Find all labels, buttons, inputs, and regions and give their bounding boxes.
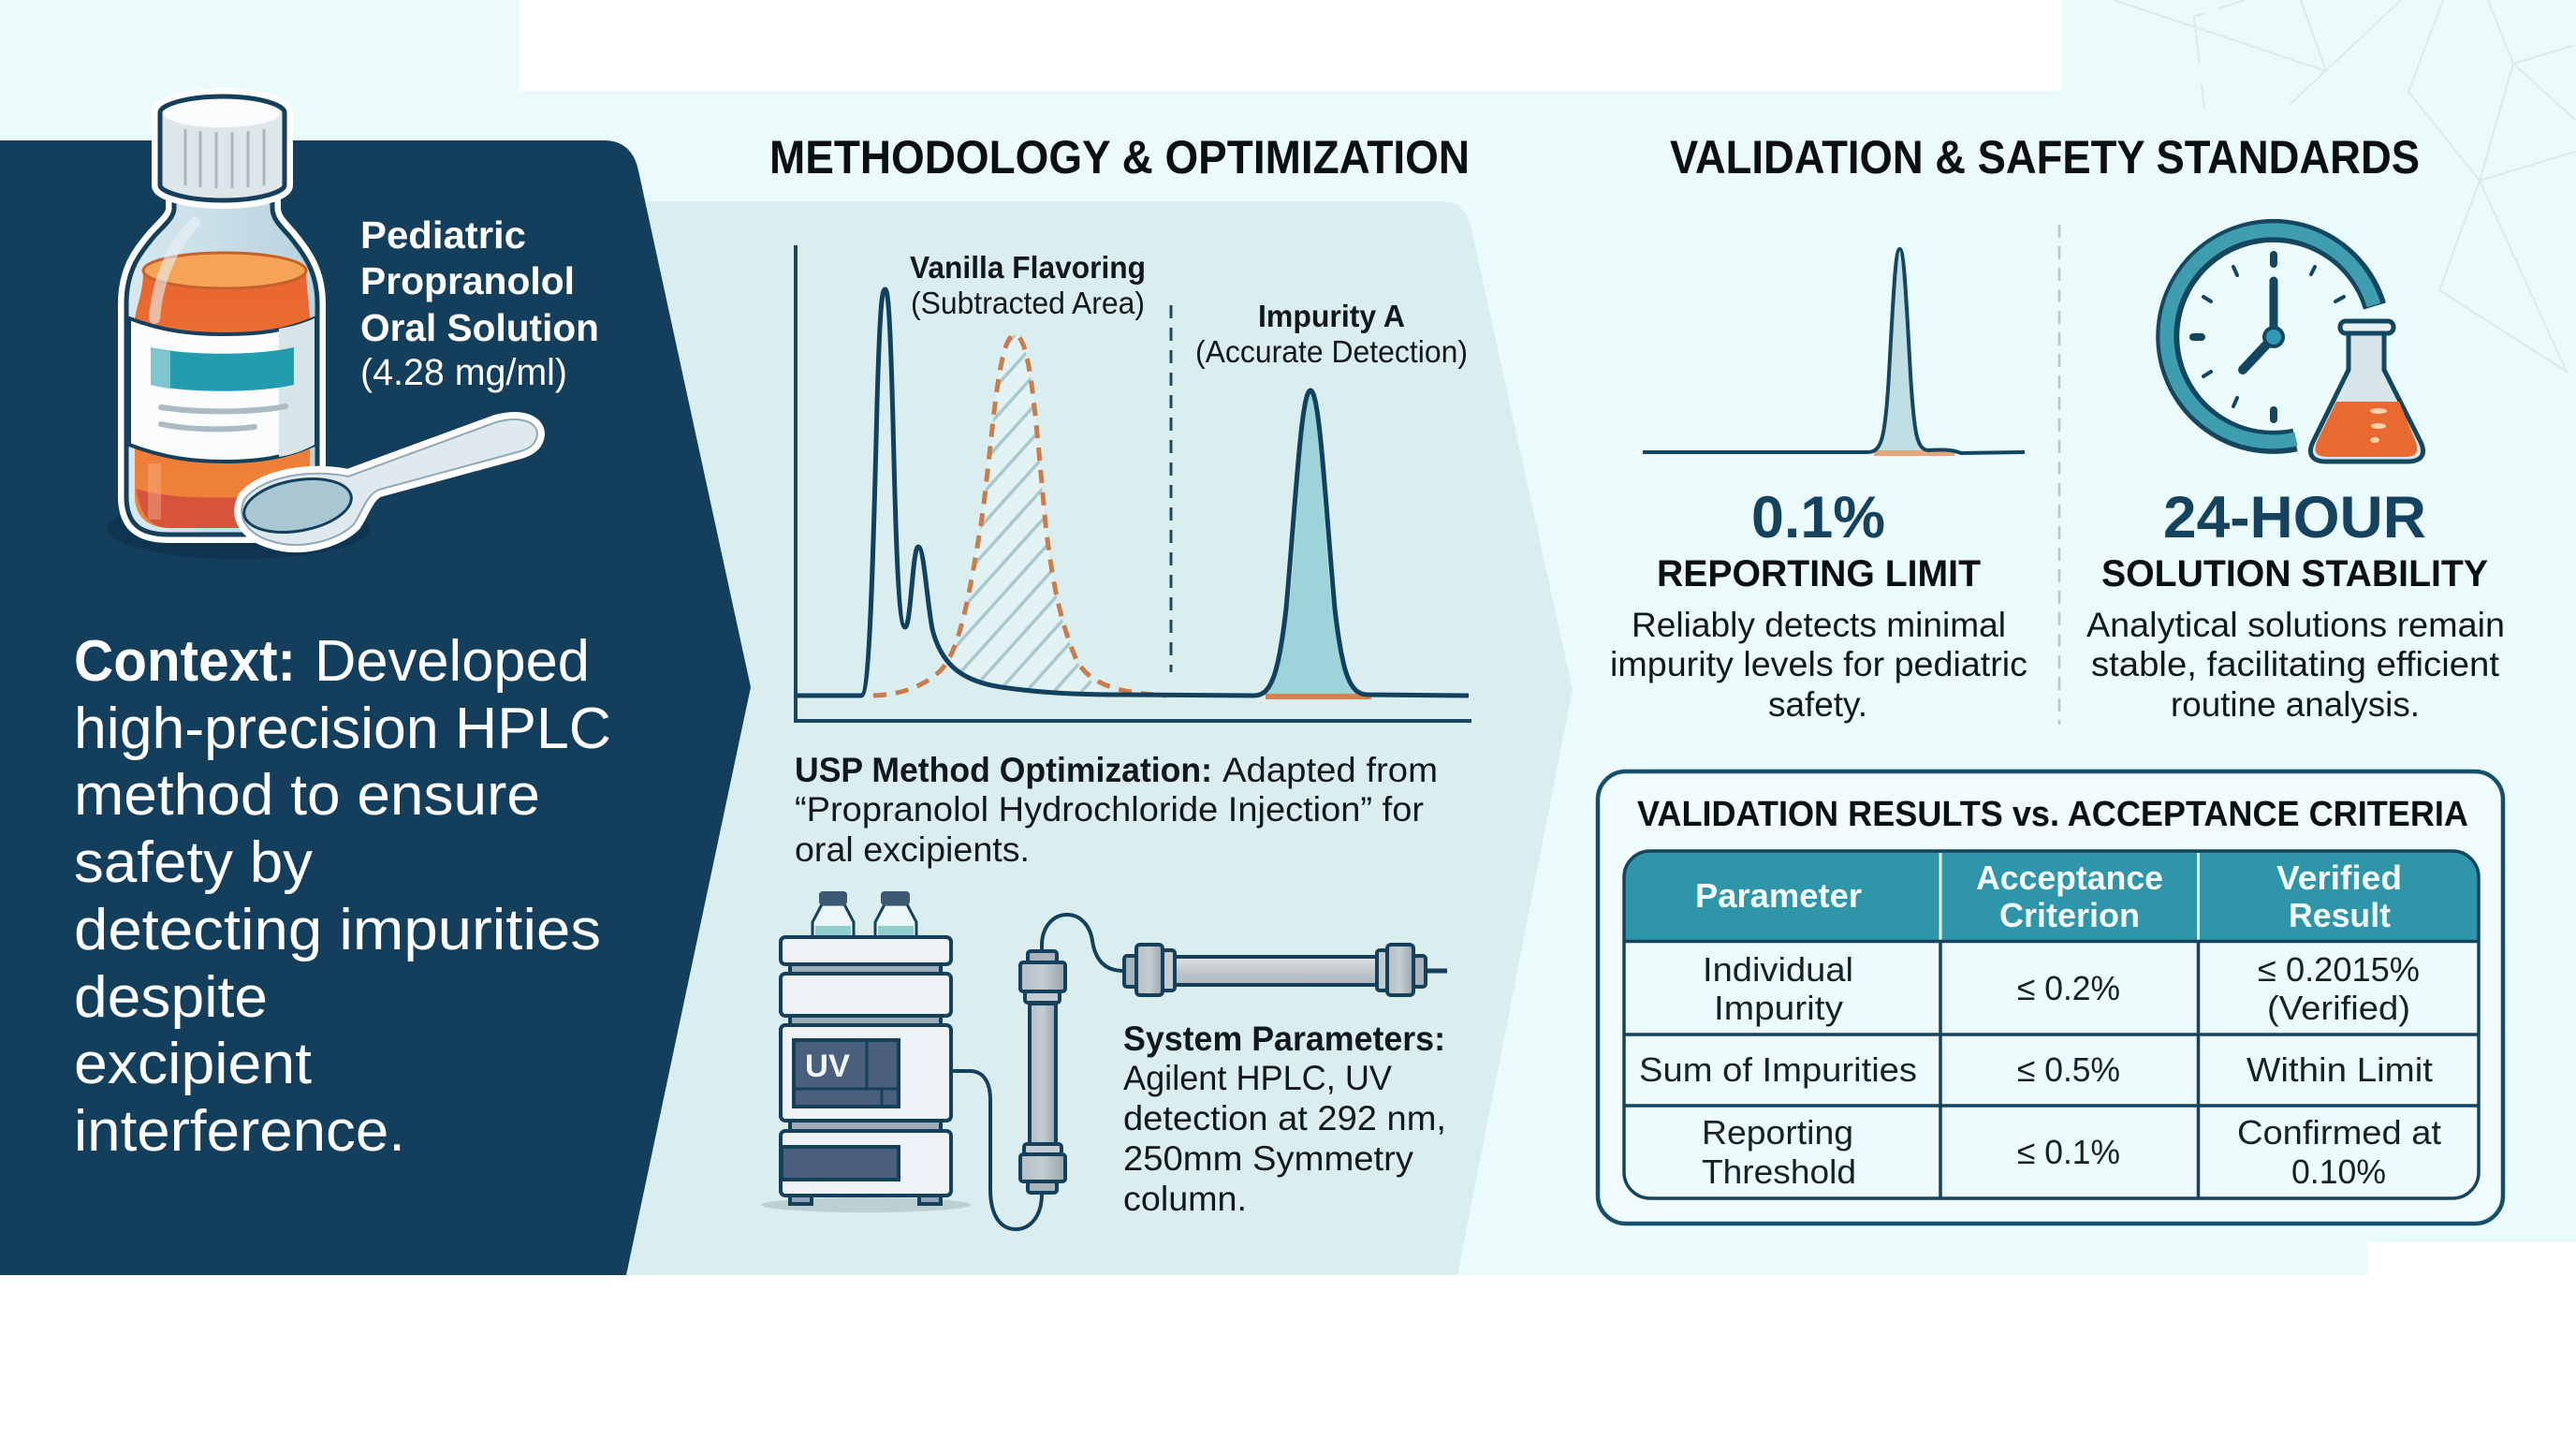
row: reporting threshold: Reporting [1702,1113,1853,1152]
solvent bottles [812,891,916,937]
tier 2 [781,974,951,1016]
row: reporting threshold: 0.10% [2291,1152,2386,1191]
reporting limit description: Reliably detects minimal [1632,606,2006,644]
product name: Propranolol [360,259,575,302]
row: reporting threshold: ≤ 0.1% [2017,1133,2120,1171]
USP text: Adapted from [1222,751,1438,789]
context text: Context: [74,629,296,694]
row: individual impurity [1703,950,2420,1027]
icon: clock and flask [2167,230,2423,462]
row: reporting threshold: Confirmed at [2237,1113,2441,1152]
UV label: UV [805,1049,850,1084]
stability description: stable, facilitating efficient [2091,645,2500,683]
row: individual impurity: (Verified) [2267,989,2410,1027]
stat: reporting limit [1610,485,2027,724]
row: individual impurity: ≤ 0.2% [2017,969,2120,1007]
context text: detecting impurities [74,898,601,962]
table [1624,851,2479,1198]
heading: methodology: METHODOLOGY & OPTIMIZATION [769,131,1470,183]
impurity baseline strip [1266,694,1371,699]
USP text: “Propranolol Hydrochloride Injection” for [795,790,1424,829]
row: sum of impurities: Sum of Impurities [1639,1050,1917,1089]
table grid [1624,851,2479,1198]
panel: methodology background [468,201,1573,1275]
row: individual impurity: Individual [1703,950,1853,989]
context text: method to ensure [74,763,540,828]
row: individual impurity: ≤ 0.2015% [2258,950,2420,989]
table header [1624,851,2479,941]
icon: bottle and spoon [108,96,537,559]
row: sum of impurities: Within Limit [2247,1050,2433,1089]
label: vanilla: (Subtracted Area) [911,286,1145,320]
divider [1170,305,1172,672]
tier 1 [781,937,951,964]
row: reporting threshold [1702,1113,2441,1191]
context text: excipient [74,1032,312,1096]
bottle cap [160,96,285,200]
clock ring [2167,230,2375,442]
feet [790,1196,941,1204]
table header: Result [2289,896,2391,934]
tier 4 [781,1131,951,1196]
24-hour value: 24-HOUR [2163,485,2426,550]
shadow [761,1197,971,1212]
decorative network lines [2114,0,2575,372]
context text: safety by [74,830,313,895]
icon: vertical column [1020,951,1065,1193]
table header: Verified [2276,858,2402,897]
impurity peak fill [1262,390,1363,696]
stat: solution stability [2086,485,2505,724]
panel: validation table card [1598,771,2503,1224]
system parameters text: Agilent HPLC, UV [1123,1059,1392,1097]
system parameters text: System Parameters: [1123,1020,1445,1058]
stability description [2086,606,2505,724]
icon: horizontal column [1124,945,1426,995]
product name: Oral Solution [360,306,599,349]
USP text: oral excipients. [795,830,1030,869]
product name [360,213,599,393]
table title: VALIDATION RESULTS vs. ACCEPTANCE CRITERIA [1637,795,2468,834]
connectors [790,964,941,1131]
context text: interference. [74,1099,405,1164]
bottle label [129,318,315,462]
heading: validation: VALIDATION & SAFETY STANDARDS [1670,131,2420,183]
table header: Acceptance [1976,858,2163,897]
label: impurity: Impurity A [1258,299,1405,333]
label: impurity [1195,299,1468,369]
USP text: USP Method Optimization: [795,751,1212,789]
system parameters text [1123,1020,1446,1218]
tier 3 detector [781,1025,951,1121]
icon: tubing [951,915,1447,1229]
label: vanilla [910,250,1146,320]
context text: despite [74,965,268,1030]
vanilla subtracted hatch area [949,335,1109,693]
label: vanilla: Vanilla Flavoring [910,250,1146,285]
bottle body [126,201,317,535]
vanilla dashed curve [873,335,1166,696]
panel: context (dark) [0,140,751,1275]
row: sum of impurities: ≤ 0.5% [2017,1050,2120,1089]
solution stability label: SOLUTION STABILITY [2101,553,2488,594]
USP text [795,751,1438,869]
product name: (4.28 mg/ml) [360,352,567,393]
reporting limit label: REPORTING LIMIT [1657,553,1981,594]
product name: Pediatric [360,213,526,257]
flask [2310,321,2423,462]
table header: Parameter [1695,876,1862,915]
stat divider [2058,225,2060,725]
clock hands [2243,281,2283,370]
context text: Developed [315,629,590,694]
context text [74,629,611,1164]
context text: high-precision HPLC [74,697,611,761]
small peak chart [1643,249,2025,453]
row: sum of impurities [1639,1050,2433,1089]
sample trace [796,289,1469,696]
system parameters text: detection at 292 nm, [1123,1099,1446,1137]
stability description: routine analysis. [2171,685,2420,724]
0.1% value: 0.1% [1751,485,1885,550]
table header: Criterion [1999,896,2140,934]
system parameters text: 250mm Symmetry [1123,1139,1414,1178]
spoon [240,419,537,545]
icon: HPLC instrument [761,891,971,1212]
axes [796,245,1471,721]
stability description: Analytical solutions remain [2086,606,2505,644]
clock ticks [2193,255,2344,419]
system parameters text: column. [1123,1180,1247,1218]
reporting limit description [1610,606,2027,724]
row: individual impurity: Impurity [1714,989,1843,1027]
chromatogram chart [796,245,1471,721]
reporting limit description: impurity levels for pediatric [1610,645,2027,683]
shadow under bottle [108,499,370,559]
reporting limit description: safety. [1768,685,1867,724]
label: impurity: (Accurate Detection) [1195,334,1468,369]
row: reporting threshold: Threshold [1702,1152,1856,1191]
